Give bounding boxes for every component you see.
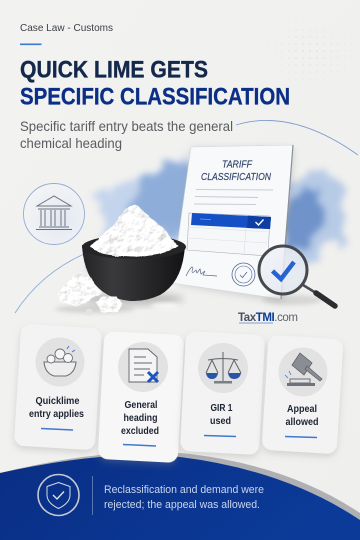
document heading: CLASSIFICATION — [201, 171, 271, 183]
icon: bowl of lime — [36, 338, 84, 386]
card: GIR 1 — [180, 331, 265, 455]
blue powder splash — [85, 155, 345, 275]
footer text: Reclassification and demand were — [104, 484, 264, 496]
document table — [187, 213, 270, 256]
brand underline — [239, 322, 273, 324]
icon: document with cross — [118, 342, 168, 392]
subtitle: Specific tariff entry beats the general — [20, 118, 233, 134]
title: QUICK LIME GETS — [20, 56, 208, 84]
card label — [29, 395, 84, 420]
bowl of quicklime — [80, 205, 186, 305]
document lines — [194, 190, 273, 204]
card label: used — [210, 415, 231, 427]
card label — [210, 402, 233, 427]
accent rule — [20, 44, 42, 45]
card accent — [285, 436, 317, 438]
card: appeal — [262, 335, 343, 454]
document heading — [201, 158, 271, 183]
quicklime powder — [90, 205, 178, 257]
shield icon — [38, 474, 79, 516]
chalk lumps — [55, 272, 179, 316]
decorative arc — [236, 120, 358, 155]
card label: heading — [124, 412, 158, 424]
icon: gavel — [278, 348, 328, 396]
icon: scales — [198, 343, 248, 393]
card label: General — [124, 399, 158, 411]
footer divider — [92, 476, 94, 515]
card: quicklime — [14, 324, 102, 450]
card label — [286, 403, 318, 428]
signature — [186, 267, 217, 276]
card label: entry applies — [29, 408, 84, 420]
card accent — [204, 436, 236, 437]
card accent — [123, 444, 156, 446]
card label: Appeal — [287, 403, 317, 415]
title — [20, 56, 290, 110]
document heading: TARIFF — [222, 158, 252, 170]
card label: excluded — [121, 425, 159, 437]
card label: GIR 1 — [210, 402, 233, 414]
card label — [121, 399, 159, 437]
card: general heading — [98, 331, 184, 463]
stamp — [232, 263, 255, 286]
card label: allowed — [286, 416, 318, 428]
eyebrow: case law: Case Law - Customs — [20, 22, 113, 34]
footer text — [104, 484, 264, 511]
subtitle — [20, 118, 233, 151]
card label: Quicklime — [36, 395, 80, 407]
footer band — [0, 452, 360, 540]
magnifying glass — [259, 246, 335, 306]
footer text: rejected; the appeal was allowed. — [104, 499, 260, 511]
subtitle: chemical heading — [20, 135, 122, 151]
TaxTMI brand: TaxTMI.com — [238, 312, 298, 324]
institution icon — [24, 184, 84, 244]
tariff document — [172, 145, 294, 302]
card accent — [41, 428, 73, 430]
title: SPECIFIC CLASSIFICATION — [20, 84, 290, 110]
